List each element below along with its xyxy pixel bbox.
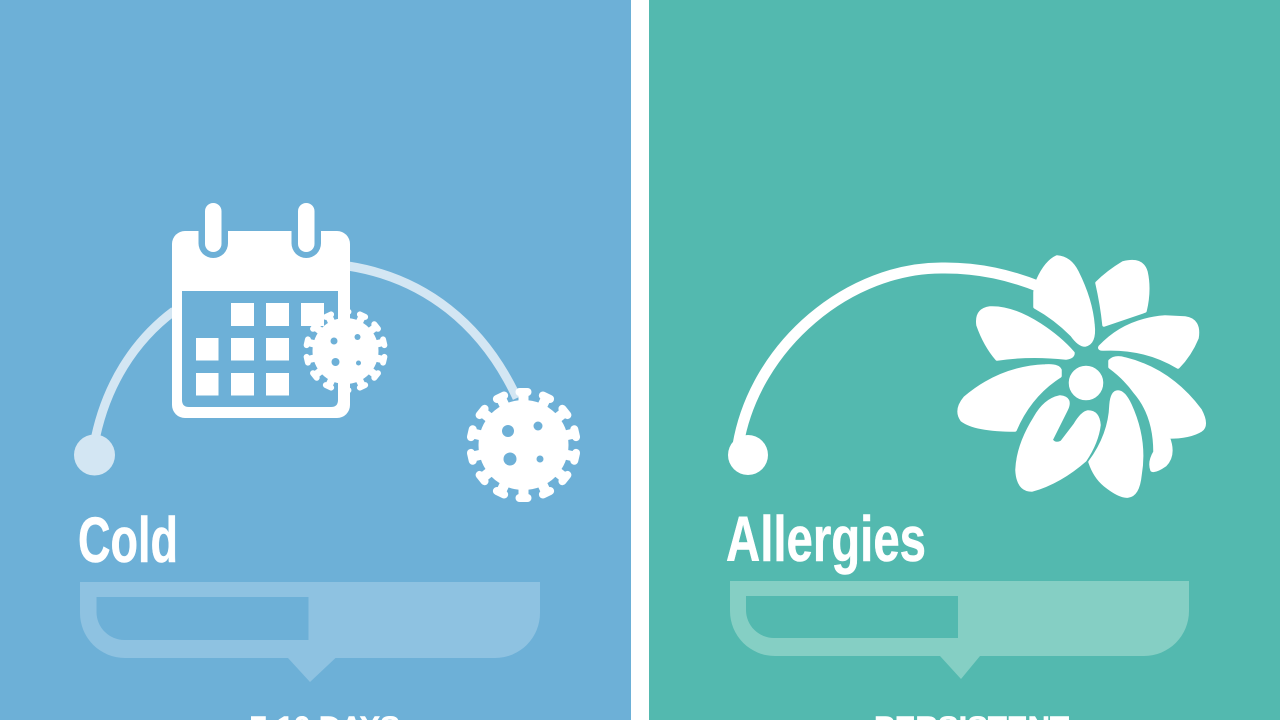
timeline start dot bbox=[728, 435, 768, 475]
arc: allergies timeline bbox=[738, 268, 1040, 445]
heading: Allergies: Allergies bbox=[726, 503, 926, 575]
panel: allergies bbox=[649, 0, 1280, 720]
icon: flower bbox=[959, 257, 1204, 496]
arc: cold timeline bbox=[94, 266, 517, 445]
panel: cold bbox=[0, 0, 631, 720]
icon: large virus bbox=[466, 388, 581, 502]
timeline start dot bbox=[74, 434, 115, 476]
duration bar: allergies bbox=[730, 581, 1189, 679]
duration bar: cold bbox=[80, 582, 540, 682]
icon: calendar bbox=[172, 203, 350, 418]
heading: Cold: Cold bbox=[78, 504, 178, 576]
icon: small virus bbox=[303, 309, 388, 393]
